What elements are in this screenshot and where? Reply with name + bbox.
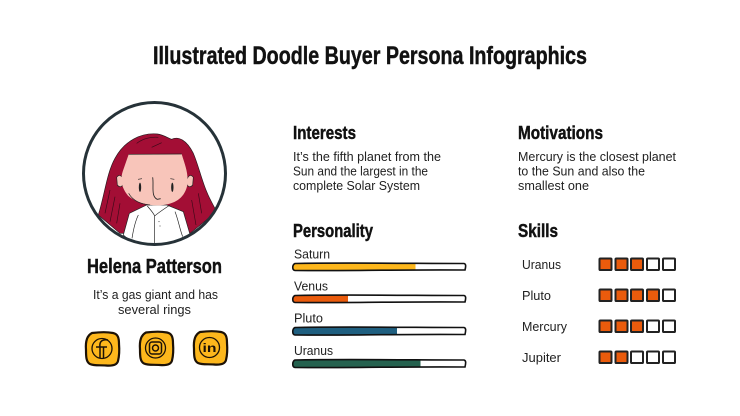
heading: Interests [293,123,356,143]
bar: Pluto [293,312,466,335]
heading: Motivations [518,123,603,143]
icon: instagram [140,332,173,365]
description: It’s a gas giant and has [93,288,218,302]
bar: Pluto: Pluto [294,312,323,326]
heading: Personality [293,221,373,241]
name: Helena Patterson [87,256,222,278]
bar: Venus [293,280,466,303]
skill: Jupiter [522,351,675,365]
skill: Pluto: Pluto [522,289,551,303]
description: several rings [118,303,191,317]
body text [293,150,441,193]
body text: Sun and the largest in the [293,164,428,178]
title: Illustrated Doodle Buyer Persona Infographics [153,42,587,70]
skill: Pluto [522,289,675,303]
heading: Skills [518,221,558,241]
panel: personality [293,221,466,368]
icon: linkedin [194,331,227,365]
bar: Uranus: Uranus [294,344,333,358]
body text: It’s the fifth planet from the [293,150,441,164]
panel: motivations [518,123,677,193]
skill: Uranus [522,258,675,272]
body text [518,150,677,193]
body text: to the Sun and also the [518,164,645,178]
skill: Uranus: Uranus [522,258,561,272]
icon: facebook [86,332,119,366]
skill: Jupiter: Jupiter [522,351,561,365]
description [93,288,218,317]
skill: Mercury: Mercury [522,320,568,334]
body text: smallest one [518,179,589,193]
panel: profile [84,102,227,366]
skill: Mercury [522,320,675,334]
avatar portrait [84,102,226,248]
panel: interests [293,123,441,193]
bar: Saturn: Saturn [294,248,330,262]
bar: Venus: Venus [294,280,328,294]
icon: linkedin: in [202,341,216,355]
body text: Mercury is the closest planet [518,150,677,164]
bar: Saturn [293,248,466,271]
body text: complete Solar System [293,179,420,193]
panel: skills [518,221,675,365]
bar: Uranus [293,344,466,368]
